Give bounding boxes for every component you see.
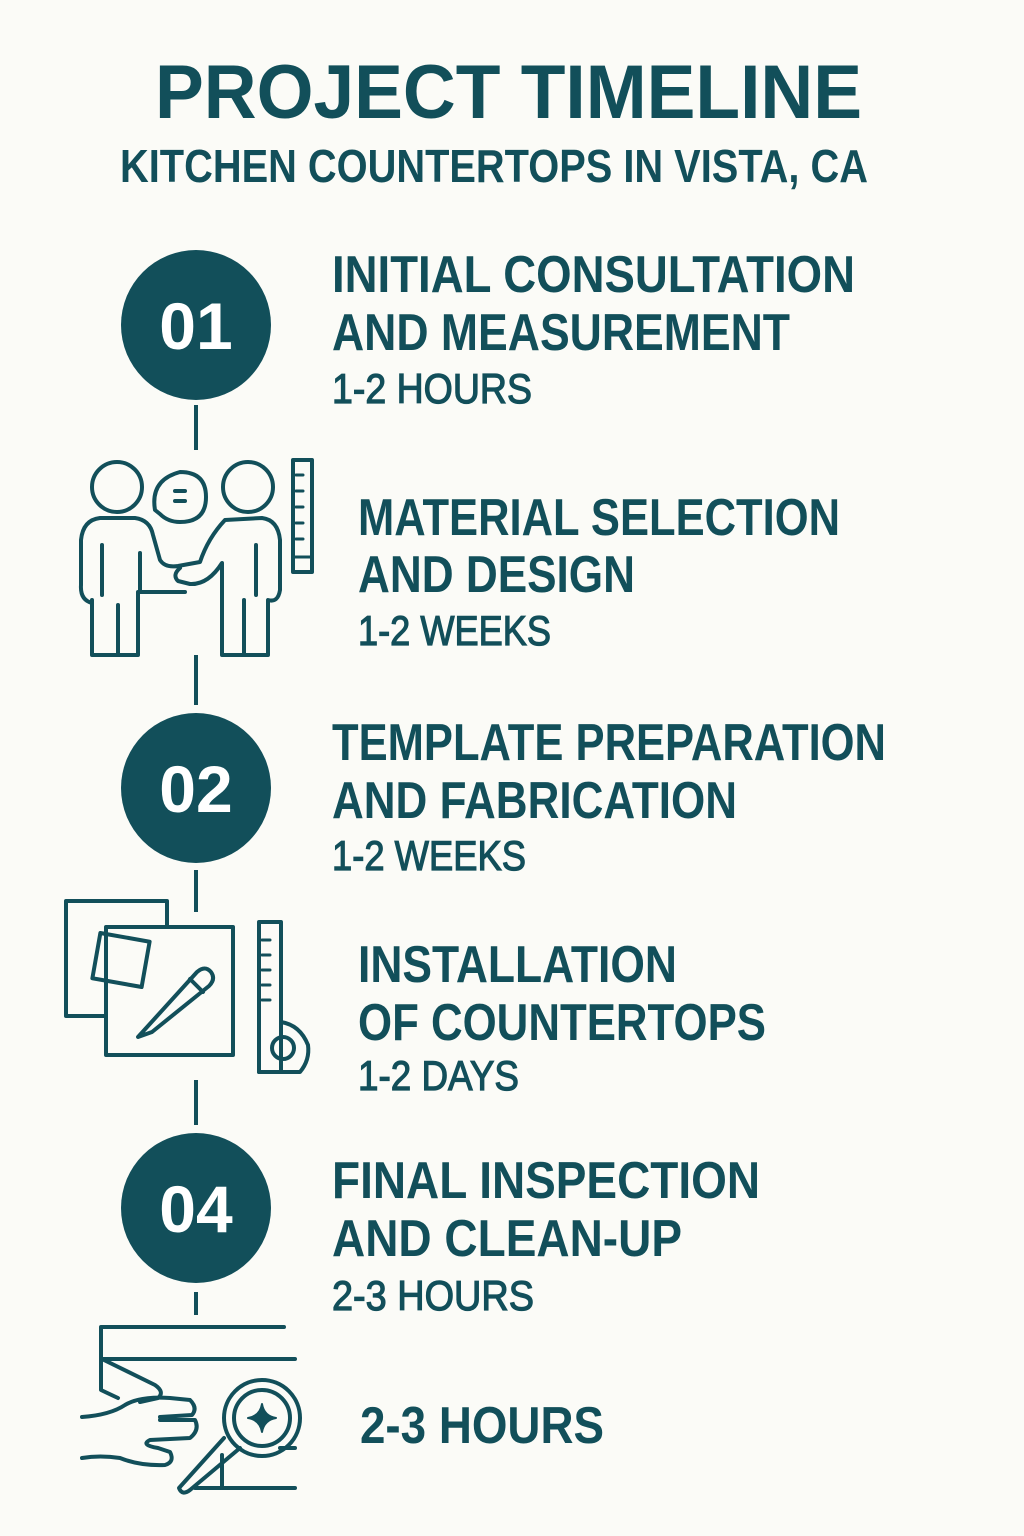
step 1 text: AND MEASUREMENT <box>332 304 790 362</box>
step 2 text: AND DESIGN <box>358 546 635 604</box>
step 5 text: AND CLEAN-UP <box>332 1210 682 1268</box>
step marker 04 <box>121 1133 271 1283</box>
step marker 01 <box>121 250 271 400</box>
step 2 text: MATERIAL SELECTION <box>358 489 840 547</box>
step marker 02: 02 <box>159 752 233 826</box>
title: PROJECT TIMELINE <box>155 50 862 135</box>
step 1 text <box>332 246 855 412</box>
step 3 text <box>332 714 886 879</box>
timeline connector <box>194 405 198 1315</box>
step 2 text <box>358 489 840 654</box>
step 1 text: INITIAL CONSULTATION <box>332 246 855 304</box>
step marker 01: 01 <box>159 289 233 363</box>
step 1 text: 1-2 HOURS <box>332 365 532 412</box>
step marker 02 <box>121 713 271 863</box>
step 4 text <box>358 936 766 1099</box>
icon: consultation people <box>81 460 312 655</box>
step 2 text: 1-2 WEEKS <box>358 607 551 654</box>
step 4 text: OF COUNTERTOPS <box>358 994 766 1052</box>
step 4 text: 1-2 DAYS <box>358 1052 519 1099</box>
step 3 text: TEMPLATE PREPARATION <box>332 714 886 772</box>
step 5 text <box>332 1152 760 1319</box>
step 4 text: INSTALLATION <box>358 936 677 994</box>
step 5 text: FINAL INSPECTION <box>332 1152 760 1210</box>
step marker 04: 04 <box>159 1172 233 1246</box>
step 3 text: AND FABRICATION <box>332 772 737 830</box>
step 3 text: 1-2 WEEKS <box>332 832 526 879</box>
closing duration: 2-3 HOURS <box>360 1397 604 1455</box>
step 5 text: 2-3 HOURS <box>332 1272 534 1319</box>
icon: template and ruler <box>66 901 308 1072</box>
icon: inspection hand and magnifier <box>82 1327 300 1493</box>
subtitle: KITCHEN COUNTERTOPS IN VISTA, CA <box>120 140 868 192</box>
